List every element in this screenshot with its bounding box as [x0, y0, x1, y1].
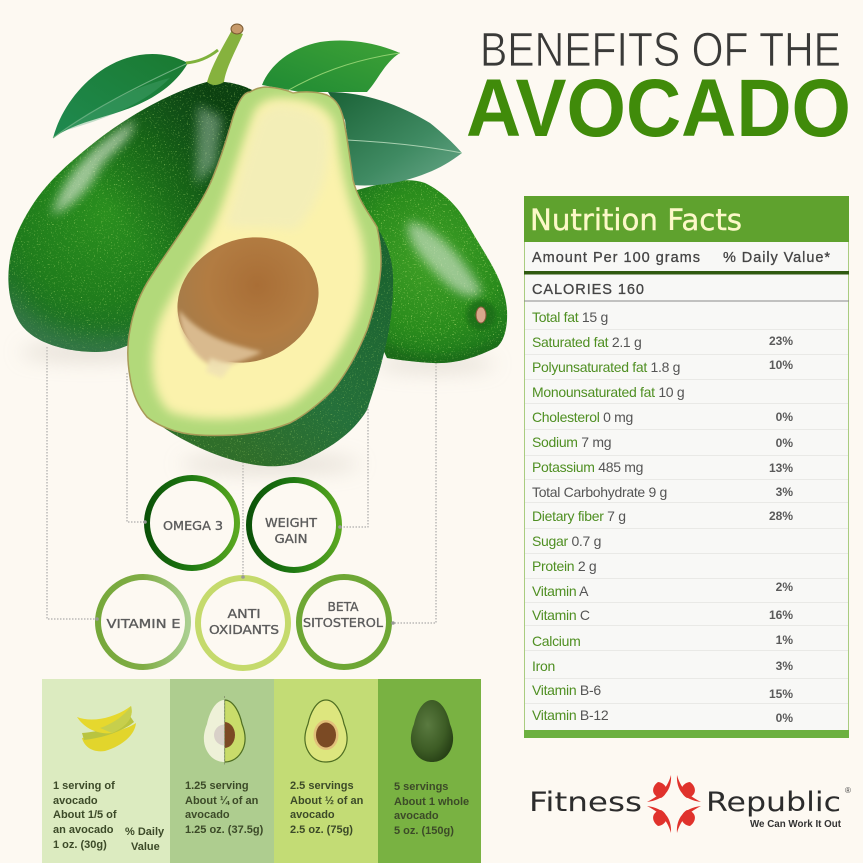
daily value percentages: 23% [769, 334, 793, 348]
serving column: 1 serving [42, 679, 170, 863]
nutrient rows: Protein 2 g [532, 558, 596, 574]
avocado: left whole [8, 82, 252, 352]
daily value percentages: 3% [776, 659, 793, 673]
leaf: top right [262, 40, 400, 92]
table footer band [524, 730, 849, 738]
serving text: About 1 whole [394, 796, 469, 808]
serving text: an avocado [53, 824, 114, 836]
daily value percentages: 0% [776, 410, 793, 424]
daily value percentages [769, 334, 793, 725]
icon: quarter avocado [204, 696, 245, 765]
daily value percentages: 28% [769, 509, 793, 523]
daily value percentages: 1% [776, 633, 793, 647]
serving column: 1.25 serving [170, 679, 274, 863]
nutrient rows: Total fat 15 g [532, 309, 608, 325]
column headers: % Daily Value* [723, 250, 830, 266]
nutrient rows: Sugar 0.7 g [532, 533, 601, 549]
circle: beta sitosterol: SITOSTEROL [303, 615, 383, 630]
daily value percentages: 15% [769, 687, 793, 701]
circle: omega 3: OMEGA 3 [163, 518, 223, 533]
serving column: 5 servings [378, 679, 481, 863]
logo word: fitness: Fitness [529, 787, 642, 818]
calories row: CALORIES 160 [532, 282, 644, 298]
title [466, 22, 851, 154]
circle: beta sitosterol: BETA [328, 599, 359, 614]
circle: weight gain [249, 480, 342, 570]
avocado: right blossom end [476, 307, 486, 323]
table body [524, 196, 848, 738]
serving text: About ½ of an [290, 795, 364, 807]
logo tagline: We Can Work It Out [750, 819, 842, 830]
flesh: pale upper area [225, 105, 329, 230]
daily value percentages: 10% [769, 358, 793, 372]
circle: anti oxidants: ANTI [228, 606, 260, 621]
serving text: 2.5 servings [290, 780, 354, 792]
circle: anti oxidants: OXIDANTS [209, 622, 279, 637]
title line: avocado: AVOCADO [466, 61, 851, 154]
leaf: left [53, 50, 218, 138]
benefit circles [95, 478, 395, 668]
nutrient rows: Vitamin B-12 [532, 707, 609, 723]
daily value note: Value [131, 841, 160, 853]
daily value note: % Daily [125, 826, 165, 838]
serving text: 1.25 serving [185, 780, 249, 792]
circle: vitamin e [95, 577, 188, 667]
flesh [128, 87, 381, 436]
nutrient rows: Cholesterol 0 mg [532, 409, 633, 425]
avocado: right whole [357, 180, 508, 364]
row separators [525, 330, 848, 704]
serving text: 1 serving of [53, 780, 115, 792]
icon: whole avocado [411, 700, 453, 762]
logo word: republic: Republic [706, 787, 841, 818]
serving text: 1.25 oz. (37.5g) [185, 824, 264, 836]
table header band [524, 196, 849, 242]
serving text: 5 servings [394, 781, 448, 793]
icon: avocado slices [77, 706, 136, 751]
leaf: right [328, 92, 462, 185]
serving text: About 1/5 of [53, 809, 117, 821]
logo: fitness republic [529, 775, 851, 833]
icon: half avocado [305, 700, 347, 762]
connector lines from avocado to benefit circles [47, 347, 436, 623]
ground shadows [20, 344, 495, 472]
nutrient rows: Total Carbohydrate 9 g [532, 484, 667, 500]
serving text: 2.5 oz. (75g) [290, 824, 353, 836]
nutrient rows: Dietary fiber 7 g [532, 508, 626, 524]
serving text: 1 oz. (30g) [53, 839, 107, 851]
nutrient rows: Saturated fat 2.1 g [532, 334, 642, 350]
flesh: inner yellow [152, 98, 365, 419]
column headers [532, 250, 830, 266]
daily value percentages: 3% [776, 485, 793, 499]
nutrient rows: Iron [532, 658, 555, 674]
daily value percentages: 13% [769, 461, 793, 475]
serving text: avocado [185, 809, 230, 821]
avocado photo illustration [0, 24, 515, 472]
column headers: Amount Per 100 grams [532, 250, 700, 266]
daily value percentages: 2% [776, 580, 793, 594]
circle: anti oxidants [198, 575, 288, 668]
circle: beta sitosterol [299, 577, 395, 667]
registered mark: ® [845, 786, 851, 795]
panel: nutrition facts [524, 196, 849, 738]
panel: serving sizes [42, 679, 481, 863]
serving text: About ¼ of an [185, 795, 259, 807]
circle: weight gain: WEIGHT [265, 515, 317, 530]
table heading: Nutrition Facts [530, 203, 742, 237]
title line: benefits of the: BENEFITS OF THE [480, 22, 841, 77]
nutrient rows: Sodium 7 mg [532, 434, 611, 450]
serving text: avocado [290, 809, 335, 821]
circle: weight gain: GAIN [274, 531, 308, 546]
seed [158, 216, 338, 384]
daily value percentages: 0% [776, 711, 793, 725]
nutrient rows: Polyunsaturated fat 1.8 g [532, 359, 680, 375]
circle: omega 3 [143, 478, 237, 568]
nutrient rows: Vitamin C [532, 607, 590, 623]
circle: vitamin e: VITAMIN E [106, 616, 181, 631]
nutrient rows: Calcium [532, 633, 580, 649]
serving text: avocado [394, 810, 439, 822]
nutrient rows: Potassium 485 mg [532, 459, 643, 475]
avocado: cut half [128, 87, 400, 470]
nutrient rows [532, 309, 684, 723]
daily value percentages: 16% [769, 608, 793, 622]
serving text: avocado [53, 795, 98, 807]
daily value percentages: 0% [776, 436, 793, 450]
serving column: 2.5 servings [274, 679, 378, 863]
nutrient rows: Monounsaturated fat 10 g [532, 384, 684, 400]
nutrient rows: Vitamin A [532, 583, 589, 599]
serving text: 5 oz. (150g) [394, 825, 454, 837]
logo mark [647, 775, 701, 833]
stem [207, 24, 243, 85]
nutrient rows: Vitamin B-6 [532, 682, 601, 698]
